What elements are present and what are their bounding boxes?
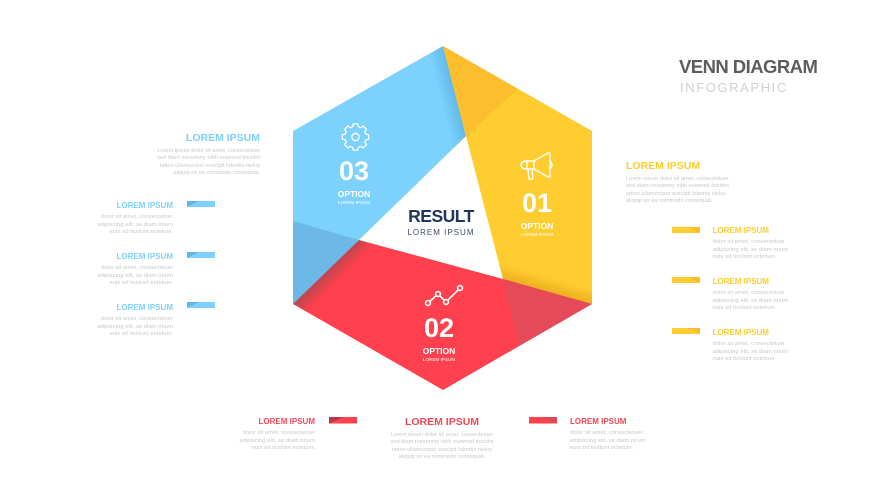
blue item 3: LOREM IPSUM — [117, 303, 173, 312]
red right item: LOREM IPSUM — [570, 417, 626, 426]
red main text block: LOREM IPSUM — [405, 416, 479, 428]
yellow item 1: LOREM IPSUM — [712, 226, 769, 235]
yellow segment — [443, 46, 592, 304]
yellow marker 2 — [672, 277, 700, 283]
number 02: 02 — [424, 313, 454, 343]
title: VENN DIAGRAM — [679, 56, 817, 77]
blue item 1: dolor sit amet, consectetuer adipiscing elit, se diam nnum euis od ticidunt ectetuer. — [97, 214, 173, 235]
yellow item 2: dolor sit amet, consectetuer adipiscing elit, se diam nnum euis od ticidunt ectetuer. — [712, 290, 788, 311]
option 02 label: OPTION — [423, 346, 455, 356]
center result heading: RESULT — [408, 206, 474, 226]
yellow marker 1 — [672, 227, 700, 233]
red left item: LOREM IPSUM — [259, 417, 315, 426]
blue main text block — [157, 132, 260, 176]
yellow item 3 — [712, 328, 788, 362]
blue item 1 — [97, 201, 173, 235]
option 03 label: OPTION — [338, 189, 370, 199]
blue item 2 — [97, 252, 173, 286]
blue item 2: LOREM IPSUM — [117, 252, 173, 261]
yellow item 3: LOREM IPSUM — [712, 328, 769, 337]
yellow marker 3 — [672, 328, 700, 334]
red left item: dolor sit amet, consectetuer adipiscing elit, se diam nnum euis od ticidunt ectetuer. — [239, 430, 315, 451]
center result subtext: LOREM IPSUM — [407, 228, 474, 237]
red main text block — [390, 416, 494, 460]
yellow item 3: dolor sit amet, consectetuer adipiscing elit, se diam nnum euis od ticidunt ectetuer. — [712, 341, 788, 362]
red marker right — [529, 417, 557, 424]
blue item 3: dolor sit amet, consectetuer adipiscing elit, se diam nnum euis od ticidunt ectetuer. — [97, 316, 173, 337]
red segment — [293, 240, 592, 390]
number 01: 01 — [522, 188, 552, 218]
red marker left — [329, 417, 357, 424]
yellow item 2 — [712, 277, 788, 311]
icon: line chart — [426, 286, 462, 305]
blue item 1: LOREM IPSUM — [117, 201, 173, 210]
blue marker 3 — [187, 302, 215, 308]
yellow main text block: Lorem ipsum dolor sit amet, consectetuer sed diam nonummy nibh euismod tincidnt tation ullamcorper suscipit lobortis nisluy aliquip ex ea commodo consequat. — [626, 176, 729, 204]
blue main text block: Lorem ipsum dolor sit amet, consectetuer sed diam nonummy nibh euismod tincidnt tation ullamcorper suscipit lobortis nisluy aliquip ex ea commodo consequat. — [157, 148, 260, 176]
option 01 label: OPTION — [521, 221, 553, 231]
option 01 sublabel: LOREM IPSUM — [521, 232, 553, 237]
subtitle: INFOGRAPHIC — [680, 80, 788, 95]
icon: megaphone — [521, 153, 552, 179]
blue main text block: LOREM IPSUM — [186, 132, 260, 144]
blue marker 2 — [187, 252, 215, 258]
yellow item 2: LOREM IPSUM — [712, 277, 769, 286]
yellow main text block: LOREM IPSUM — [626, 160, 700, 172]
blue segment — [293, 46, 466, 304]
blue marker 1 — [187, 201, 215, 207]
yellow item 1: dolor sit amet, consectetuer adipiscing elit, se diam nnum euis od ticidunt ectetuer. — [712, 239, 788, 260]
option 03 sublabel: LOREM IPSUM — [338, 200, 370, 205]
yellow main text block — [626, 160, 729, 204]
blue item 2: dolor sit amet, consectetuer adipiscing elit, se diam nnum euis od ticidunt ectetuer. — [97, 265, 173, 286]
option 02 sublabel: LOREM IPSUM — [423, 357, 455, 362]
red left item — [239, 417, 315, 451]
icon: gear — [342, 124, 369, 150]
red main text block: Lorem ipsum dolor sit amet, consectetuer sed diam nonummy nibh euismod tincidnt tation ullamcorper suscipit lobortis nisluy aliquip ex ea commodo consequat. — [391, 432, 493, 460]
number 03: 03 — [339, 156, 369, 186]
red right item — [570, 417, 646, 451]
blue item 3 — [97, 303, 173, 337]
yellow item 1 — [712, 226, 788, 260]
red right item: dolor sit amet, consectetuer adipiscing elit, se diam nnum euis od ticidunt ectetuer. — [570, 430, 646, 451]
